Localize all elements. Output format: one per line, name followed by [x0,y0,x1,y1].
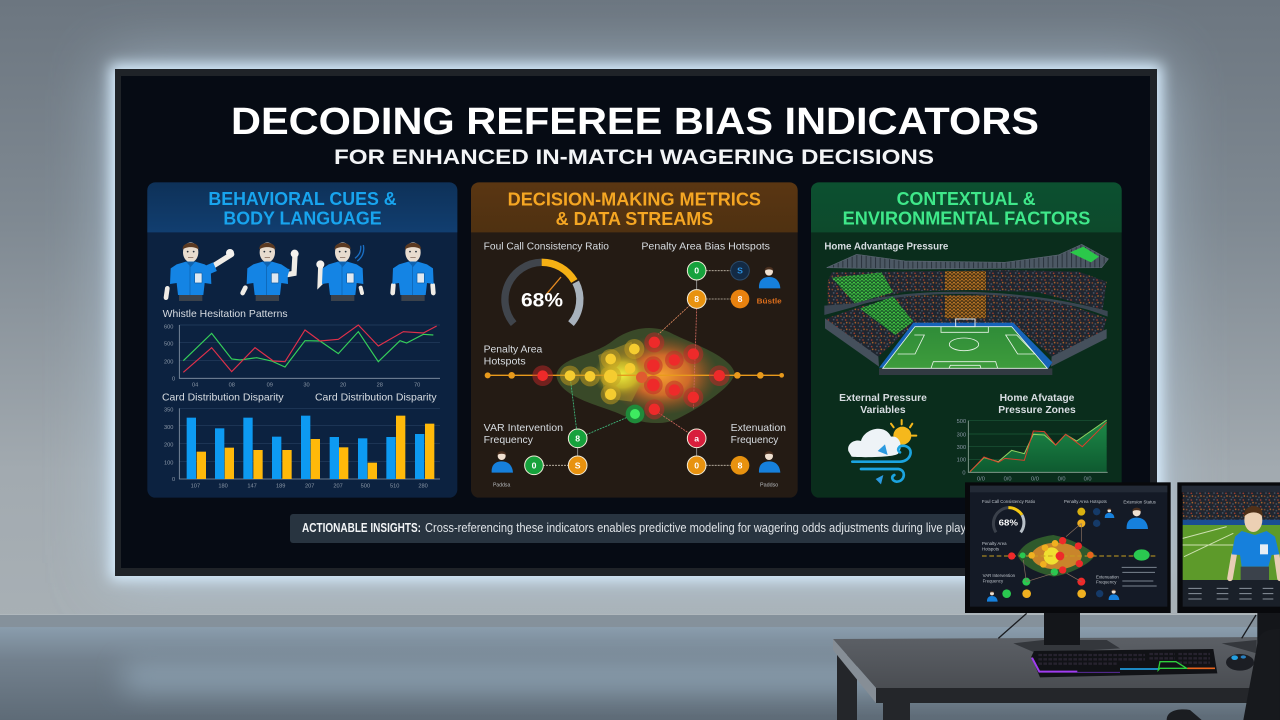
numbered nodes lower right: 0 [694,460,699,470]
label: extenuation frequency [731,423,786,446]
line chart: whistle hesitation: 70 [414,382,420,388]
label: VAR frequency: Frequency [484,435,534,446]
area chart: pressure zones: 0/0 [1004,476,1012,482]
monitor left: Frequency [983,578,1004,583]
area chart: pressure zones: 100 [957,458,966,464]
actionable insights bar: ACTIONABLE INSIGHTS: [302,520,421,535]
bar chart: card distribution: 280 [418,484,428,490]
referee figure 1 arm raised [166,242,234,301]
icon: weather cloud sun wind [848,420,916,484]
monitor left: Extenuation [1096,574,1119,579]
bar chart: card distribution: 300 [164,425,173,431]
panel heading: contextual: CONTEXTUAL & [897,188,1036,209]
monitor left: Penalty Area [982,541,1007,546]
label: home advantage pressure: Home Advantage Pressure [824,242,949,253]
bar chart: card distribution: 189 [276,484,285,490]
bar chart: card distribution: 100 [164,460,173,466]
bar chart: card distribution: 200 [164,443,173,449]
referee figure 3 whistle [316,242,364,301]
numbered nodes top: 8 [738,294,743,304]
subtitle: FOR ENHANCED IN-MATCH WAGERING DECISIONS [334,146,934,169]
label: VAR frequency: VAR Intervention [484,423,563,434]
heatmap blob [556,328,734,423]
monitor left: VAR Intervention [983,573,1016,578]
bar chart: card distribution: 207 [333,484,343,490]
label: VAR frequency [484,423,563,446]
display screen [115,69,1157,576]
label: extenuation frequency: Extenuation [731,423,786,434]
mini referee top right: Bústle [757,297,782,306]
bar chart: card distribution: 180 [218,484,228,490]
numbered nodes lower left: 0 [532,460,537,470]
actionable insights bar [290,514,990,543]
bar chart: card distribution: 350 [164,408,173,414]
gauge: 68 percent: 68% [521,291,563,312]
numbered nodes top: S [737,266,743,276]
panel: decision-making metrics [471,182,798,498]
panel: contextual and environmental factors [811,182,1122,498]
numbered nodes lower left: S [575,460,581,470]
numbered nodes lower right: 8 [738,460,743,470]
monitor stand left [998,612,1120,653]
panel: behavioral cues and body language [147,182,457,498]
label: card distribution left: Card Distribution Disparity [162,392,285,403]
panel heading: decision [508,189,761,229]
monitor left: Extension Status [1123,500,1156,505]
area chart: pressure zones: 0/0 [1084,476,1092,482]
area chart: pressure zones: 0 [962,470,965,476]
panel header: contextual [811,182,1122,232]
mini referee bottom left: Paddsa [493,482,510,488]
gauge: 68 percent [505,262,580,324]
panel header: decision [471,182,798,232]
bar chart: card distribution: 207 [305,484,314,490]
keyboard [1031,649,1217,677]
line chart: whistle hesitation: 30 [303,382,310,388]
baseboard [0,614,1280,627]
bar chart: card distribution [164,408,440,490]
panel heading: contextual [843,188,1090,228]
referee figure 4 neutral [392,242,434,301]
numbered nodes lower left: 8 [575,433,580,443]
area chart: pressure zones [957,419,1108,482]
area chart: pressure zones: 500 [957,419,966,425]
monitor left: Foul Call Consistency Ratio [982,499,1036,504]
line chart: whistle hesitation: 600 [164,324,173,330]
area chart: pressure zones: 0/0 [1031,476,1039,482]
line chart: whistle hesitation: 04 [192,382,198,388]
stadium illustration [824,244,1108,375]
numbered nodes top: 0 [694,266,699,276]
screen backlight glow [108,62,1164,583]
referee figure 2 fist raised [243,242,299,301]
actionable insights bar: Cross-referencing these indicators enables predictive modeling for wagering odds adjustments during live play [425,520,966,535]
panel header: behavioral [147,182,457,232]
floor [0,627,1280,720]
horizontal data stream [485,372,784,379]
label: penalty area hotspots [484,344,543,367]
panel heading: decision: & DATA STREAMS [556,208,713,229]
monitor right [1177,482,1280,613]
line chart: whistle hesitation: 28 [377,382,383,388]
monitor left: Frequency [1096,580,1117,585]
yellow hotspots [560,339,644,404]
panel heading: behavioral: BEHAVIORAL CUES & [208,188,397,209]
label: external pressure variables: External Pressure [839,393,927,404]
line chart: whistle hesitation: 08 [229,382,235,388]
line chart: whistle hesitation: 09 [267,382,273,388]
label: external pressure variables: Variables [860,405,906,416]
line chart: whistle hesitation: 0 [172,376,175,382]
desk [833,637,1280,720]
bar chart: card distribution: 500 [361,484,370,490]
numbered nodes top: 8 [694,294,699,304]
label: home advantage pressure zones [998,393,1076,416]
bar chart: card distribution: 510 [390,484,399,490]
mini referee top right [757,267,782,306]
numbered nodes top [687,261,749,308]
main title: DECODING REFEREE BIAS INDICATORS [231,101,1039,143]
label: whistle hesitation: Whistle Hesitation Patterns [163,309,288,320]
monitor left: 68% [999,519,1018,528]
panel heading: decision: DECISION-MAKING METRICS [508,189,761,210]
office chair [1167,629,1280,720]
numbered nodes lower right: a [694,433,699,443]
numbered nodes lower right [687,429,749,475]
area chart: pressure zones: 0/0 [977,476,985,482]
label: extenuation frequency: Frequency [731,435,779,446]
network connections [534,271,740,465]
area chart: pressure zones: 0/0 [1058,476,1066,482]
red hotspots [532,332,730,419]
line chart: whistle hesitation [164,324,440,388]
area chart: pressure zones: 300 [957,432,966,438]
monitor left [965,482,1171,613]
panel heading: behavioral: BODY LANGUAGE [223,207,382,228]
label: home advantage pressure zones: Home Afvatage [1000,393,1075,404]
monitor stand right [1222,612,1280,653]
line chart: whistle hesitation: 20 [340,382,346,388]
mini referee bottom right: Paddso [760,482,778,488]
monitor left: Penalty Area Hotspots [1064,499,1107,504]
panel heading: behavioral [208,188,397,228]
bar chart: card distribution: 0 [172,477,175,483]
foreground monitors and keyboard [965,482,1280,720]
mini referee bottom right [759,451,780,488]
label: home advantage pressure zones: Pressure Zones [998,405,1076,416]
area chart: pressure zones: 300 [957,445,966,451]
bar chart: card distribution: 147 [247,484,257,490]
label: penalty area bias hotspots: Penalty Area Bias Hotspots [641,242,770,253]
monitor left: Hotspots [982,546,999,551]
green hotspot [626,405,644,423]
label: card distribution right: Card Distribution Disparity [315,392,438,403]
panel heading: contextual: ENVIRONMENTAL FACTORS [843,207,1090,228]
label: external pressure variables [839,393,927,416]
line chart: whistle hesitation: 500 [164,342,173,348]
label: penalty area hotspots: Hotspots [484,356,526,367]
label: penalty area hotspots: Penalty Area [484,344,543,355]
mini referee bottom left [492,451,513,488]
label: foul call ratio: Foul Call Consistency Ratio [484,242,609,253]
numbered nodes lower left [525,429,587,475]
line chart: whistle hesitation: 200 [164,359,173,365]
mouse [1226,654,1254,671]
bar chart: card distribution: 107 [191,484,200,490]
